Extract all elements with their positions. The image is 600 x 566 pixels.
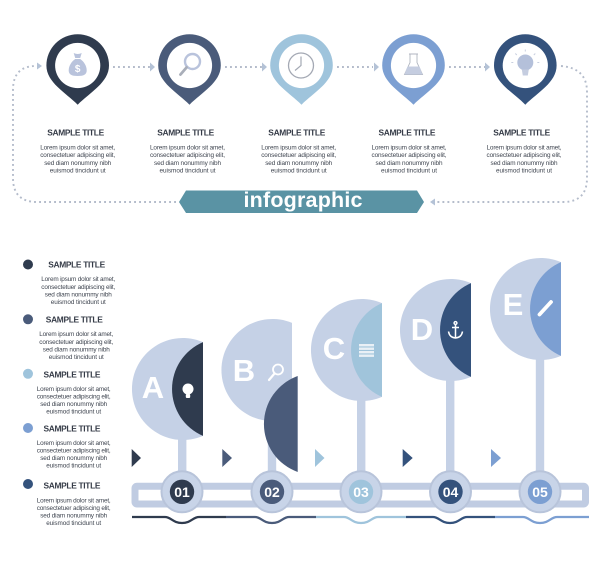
node 04: 04 [443, 484, 458, 500]
arrow: pin 4 to pin 5 [449, 62, 490, 72]
step C [311, 299, 382, 401]
step D: D [411, 312, 433, 347]
pin 1 with money bag icon [46, 34, 109, 105]
text block 4: consectetuer adipiscing elit, [372, 152, 447, 159]
node 01: 01 [174, 484, 190, 500]
text block 4 [372, 128, 447, 174]
node 03: 03 [353, 484, 369, 500]
text block 2: Lorem ipsum dolor sit amet, [150, 144, 225, 152]
icon: light bulb [182, 384, 194, 398]
text block 1: euismod tincidunt ut [50, 168, 106, 174]
text block 2: euismod tincidunt ut [160, 168, 216, 174]
node 02 [252, 471, 292, 512]
legend item 1: consectetuer adipiscing elit, [41, 284, 116, 291]
arrow: pin 1 to pin 2 [113, 62, 155, 72]
icon: money bag: $ [75, 64, 81, 75]
node 05: 05 [532, 484, 548, 500]
legend item 1: SAMPLE TITLE [48, 260, 106, 270]
legend item 2: sed diam nonummy nibh [43, 346, 110, 353]
legend item 5: consectetuer adipiscing elit, [37, 505, 111, 512]
pin 4 with flask icon [382, 34, 445, 105]
flow arrow 4 [403, 449, 413, 467]
text block 2: sed diam nonummy nibh [154, 160, 221, 167]
legend item 5: euismod tincidunt ut [46, 520, 101, 527]
icon: clock [288, 53, 314, 78]
text block 3: sed diam nonummy nibh [265, 160, 333, 167]
title banner: infographic [244, 188, 363, 212]
node 02: 02 [264, 484, 280, 500]
legend item 4: SAMPLE TITLE [44, 424, 101, 434]
text block 3: consectetuer adipiscing elit, [261, 152, 336, 159]
icon: flask [404, 54, 422, 74]
text block 5: euismod tincidunt ut [496, 168, 552, 174]
legend item 3: euismod tincidunt ut [46, 408, 101, 416]
icon: light bulb [511, 50, 539, 76]
step A: A [142, 370, 164, 405]
text block 3 [261, 128, 336, 174]
step B: B [233, 353, 255, 388]
step B [221, 319, 298, 472]
legend item 1: euismod tincidunt ut [51, 299, 106, 306]
legend item 1 [23, 260, 116, 306]
text block 4: SAMPLE TITLE [378, 128, 436, 138]
text block 1: consectetuer adipiscing elit, [40, 152, 115, 159]
legend item 3: consectetuer adipiscing elit, [37, 394, 111, 400]
flow arrow 1 [132, 449, 141, 467]
text block 5: SAMPLE TITLE [493, 128, 551, 138]
flow arrow 2 [222, 449, 232, 467]
icon: magnifier [269, 364, 283, 380]
legend item 4: Lorem ipsum dolor sit amet, [37, 440, 111, 447]
text block 5: consectetuer adipiscing elit, [486, 152, 562, 159]
title banner [179, 188, 424, 213]
pin 5 with light bulb icon [494, 34, 557, 105]
step E [490, 258, 561, 360]
pin 2 with magnifier icon [158, 34, 221, 105]
step D [400, 279, 471, 381]
text block 3: euismod tincidunt ut [271, 168, 327, 174]
step E: E [503, 287, 523, 322]
legend item 4: sed diam nonummy nibh [40, 455, 108, 462]
text block 4: euismod tincidunt ut [381, 168, 437, 174]
text block 2: SAMPLE TITLE [157, 128, 215, 138]
flow arrow 3 [315, 449, 324, 467]
legend item 1: Lorem ipsum dolor sit amet, [41, 276, 116, 283]
text block 1: Lorem ipsum dolor sit amet, [40, 144, 115, 152]
node 04 [430, 471, 471, 512]
legend item 2 [23, 314, 114, 361]
text block 1: SAMPLE TITLE [47, 128, 105, 138]
text block 5 [486, 128, 562, 174]
icon: pencil [540, 302, 551, 314]
flow arrow 5 [491, 449, 501, 467]
node 05 [520, 471, 560, 512]
arrow: pin 3 to pin 4 [337, 62, 379, 72]
pin 3 with clock icon [270, 34, 333, 105]
legend item 4: consectetuer adipiscing elit, [37, 448, 111, 455]
text block 1: sed diam nonummy nibh [44, 160, 112, 167]
text block 2: consectetuer adipiscing elit, [150, 152, 225, 159]
dotted flow path: left return [13, 62, 176, 202]
underline wave segments [132, 517, 589, 523]
text block 5: sed diam nonummy nibh [490, 160, 558, 167]
stems connecting circles to timeline [178, 355, 544, 478]
dotted flow path: right return [430, 66, 587, 206]
timeline track [135, 486, 586, 504]
text block 3: SAMPLE TITLE [268, 128, 326, 138]
legend item 4 [23, 423, 111, 470]
legend item 5: Lorem ipsum dolor sit amet, [37, 497, 111, 504]
node 01 [162, 471, 202, 512]
legend item 2: SAMPLE TITLE [46, 315, 103, 325]
step A [132, 338, 203, 440]
legend item 3: sed diam nonummy nibh [40, 401, 108, 408]
text block 4: Lorem ipsum dolor sit amet, [372, 144, 447, 152]
legend item 1: sed diam nonummy nibh [45, 291, 112, 298]
text block 3: Lorem ipsum dolor sit amet, [261, 144, 336, 152]
legend item 2: Lorem ipsum dolor sit amet, [39, 331, 114, 338]
legend item 2: euismod tincidunt ut [49, 354, 104, 361]
legend item 5: sed diam nonummy nibh [40, 512, 108, 519]
legend item 5 [23, 479, 111, 527]
text block 2 [150, 128, 225, 174]
legend item 3: SAMPLE TITLE [44, 370, 101, 380]
legend item 3 [23, 369, 111, 416]
icon: stacked lines [359, 344, 374, 357]
icon: magnifier [180, 54, 200, 74]
legend item 3: Lorem ipsum dolor sit amet, [37, 386, 111, 393]
text block 5: Lorem ipsum dolor sit amet, [486, 144, 562, 152]
icon: anchor [448, 322, 462, 338]
legend item 5: SAMPLE TITLE [44, 480, 101, 490]
node 03 [340, 471, 382, 512]
text block 1 [40, 128, 115, 174]
step C: C [323, 331, 345, 366]
text block 4: sed diam nonummy nibh [376, 160, 443, 167]
legend item 2: consectetuer adipiscing elit, [39, 339, 114, 346]
legend item 4: euismod tincidunt ut [46, 463, 101, 470]
arrow: pin 2 to pin 3 [225, 62, 267, 72]
